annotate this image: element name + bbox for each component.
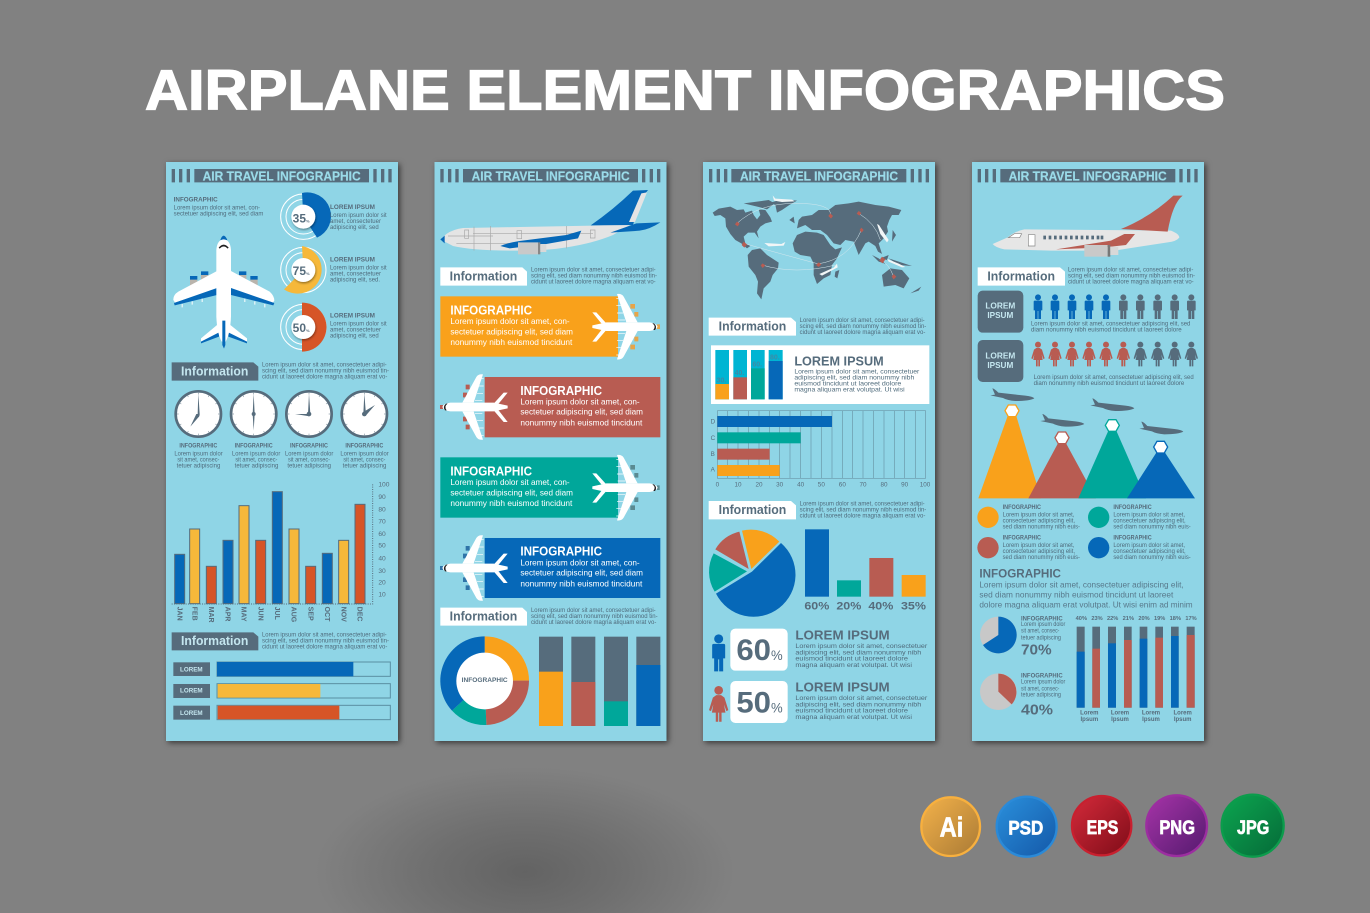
icon: female person xyxy=(709,686,728,722)
legend brick xyxy=(977,534,1080,561)
clock captions: sit amet, consec- xyxy=(288,456,330,463)
stat card 50 percent xyxy=(730,681,788,723)
information heading xyxy=(172,362,258,381)
legend orange: Lorem ipsum dolor sit amet, xyxy=(1003,512,1074,519)
monthly bar chart: AUG xyxy=(290,607,297,622)
legend brick: INFOGRAPHIC xyxy=(1003,534,1041,541)
female pictogram row xyxy=(1031,342,1198,366)
information heading xyxy=(978,267,1065,286)
clock one xyxy=(176,391,221,437)
lorem ipsum label two xyxy=(978,340,1023,382)
banner: orange: sectetuer adipiscing elit, sed diam xyxy=(450,326,573,336)
label 35 percent: adipiscing elit, sed xyxy=(330,224,379,231)
information heading: Information xyxy=(450,268,517,283)
text block two: magna aliquam erat volutpat. Ut wisi xyxy=(795,714,912,721)
stacked percent chart: 21% xyxy=(1123,616,1134,622)
information heading: Information xyxy=(719,318,786,333)
stat card 60 percent xyxy=(730,629,788,671)
monthly bar chart: FEB xyxy=(190,607,197,621)
monthly bar chart: JUN xyxy=(256,607,263,621)
information heading: Information xyxy=(719,502,786,517)
horizontal bar chart: D xyxy=(711,418,716,425)
badge: Ai xyxy=(921,797,980,856)
information text: Lorem ipsum dolor sit amet, consectetuer adipi- xyxy=(800,317,925,324)
legend blue xyxy=(1088,534,1191,561)
information text: Lorem ipsum dolor sit amet, consectetuer adipi- xyxy=(800,501,925,508)
information text: Lorem ipsum dolor sit amet, consectetuer adipi- xyxy=(531,267,656,274)
stacked percent chart: 20% xyxy=(1138,616,1150,622)
horizontal bar chart xyxy=(711,411,931,488)
monthly bar chart: MAR xyxy=(207,607,214,623)
label 75 percent: adipiscing elit, sed. xyxy=(330,276,380,283)
monthly bar chart: NOV xyxy=(339,607,346,622)
stacked percent chart: 19% xyxy=(1154,616,1165,622)
badge: EPS: EPS xyxy=(1087,818,1118,839)
legend orange xyxy=(977,504,1080,531)
donut 50 percent xyxy=(281,303,326,352)
label 75 percent xyxy=(330,256,387,283)
label 40 percent: Lorem ipsum dolor xyxy=(1021,679,1066,686)
badge: JPG: JPG xyxy=(1237,818,1269,839)
male row caption xyxy=(1031,321,1191,334)
badge: PNG: PNG xyxy=(1159,818,1195,839)
monthly bar chart: 30 xyxy=(378,568,386,575)
monthly bar chart: 20 xyxy=(378,580,386,587)
lorem ipsum label two: LOREM xyxy=(985,350,1015,360)
information text: scing elit, sed diam nonummy nibh euismod tin- xyxy=(531,273,657,280)
stacked percent chart xyxy=(1076,616,1197,723)
horizontal bar chart: 60 xyxy=(839,481,846,488)
horizontal bar chart: 20 xyxy=(755,481,763,488)
clock three xyxy=(286,391,332,437)
banner: teal: INFOGRAPHIC xyxy=(450,465,532,479)
label 50 percent: amet, consectetuer xyxy=(330,327,382,334)
intro text: sectetuer adipiscing elit, sed diam xyxy=(174,211,263,218)
stacked column chart xyxy=(539,637,660,726)
banner: brick xyxy=(440,374,660,440)
horizontal bar chart: A xyxy=(711,467,716,474)
information heading xyxy=(709,318,796,336)
monthly bar chart: OCT xyxy=(323,607,330,622)
label 40 percent: 40% xyxy=(1021,702,1053,718)
banner: orange: Lorem ipsum dolor sit amet, con- xyxy=(450,316,570,326)
monthly bar chart: 10 xyxy=(378,591,386,598)
horizontal bar chart: 50 xyxy=(818,481,825,488)
clock captions: INFOGRAPHIC xyxy=(235,443,273,450)
text block one: LOREM IPSUM xyxy=(795,628,890,643)
legend teal: consectetuer adipiscing elit, xyxy=(1113,518,1186,525)
text block two: adipiscing elit, sed diam nonummy nibh xyxy=(795,701,922,708)
card: lorem ipsum with mini columns xyxy=(711,345,929,404)
horizontal bar chart: 40 xyxy=(797,481,805,488)
icon: blue airliner side view xyxy=(440,190,660,254)
clock captions: tetuer adipiscing xyxy=(235,462,279,469)
information heading: Information xyxy=(181,363,248,378)
world map xyxy=(713,195,921,299)
male row caption: Lorem ipsum dolor sit amet, consectetuer adipiscing elit, sed xyxy=(1031,321,1191,328)
stat card 50 percent: % xyxy=(771,699,783,715)
horizontal bar chart: 10 xyxy=(734,481,742,488)
banner: blue: sectetuer adipiscing elit, sed diam xyxy=(520,568,643,578)
label 50 percent xyxy=(330,313,387,340)
infographic paragraph: sed diam nonummy nibh euismod tincidunt ut laoreet xyxy=(979,590,1174,600)
stacked percent chart: Lorem xyxy=(1111,710,1129,716)
banner: brick: Lorem ipsum dolor sit amet, con- xyxy=(520,396,640,406)
horizontal bar chart: 30 xyxy=(776,481,784,488)
donut 50 percent: 50 xyxy=(293,321,306,335)
pie 70 percent xyxy=(980,617,1017,653)
information text: Lorem ipsum dolor sit amet, consectetuer adipi- xyxy=(262,362,387,369)
text block one: magna aliquam erat volutpat. Ut wisi xyxy=(795,662,912,669)
donut 50 percent: % xyxy=(306,328,310,333)
header banner: AIR TRAVEL INFOGRAPHIC xyxy=(740,168,898,183)
lorem ipsum label one: LOREM xyxy=(985,300,1015,310)
monthly bar chart: 60 xyxy=(378,531,386,538)
icons: airplane silhouettes xyxy=(990,388,1183,434)
badge: Ai: Ai xyxy=(940,812,963,843)
clock captions: INFOGRAPHIC xyxy=(290,443,328,450)
progress bar red: LOREM xyxy=(180,711,203,717)
clock captions: INFOGRAPHIC xyxy=(179,443,218,450)
label 70 percent: sit amet, consec- xyxy=(1021,628,1059,635)
legend teal: sed diam nonummy nibh euis- xyxy=(1113,524,1191,531)
information text: cidunt ut laoreet dolore magna aliquam erat vo- xyxy=(531,619,656,626)
clock captions: INFOGRAPHIC xyxy=(345,443,384,450)
information text: scing elit, sed diam nonummy nibh euismod tin- xyxy=(531,613,658,620)
stacked percent chart: 40% xyxy=(1076,616,1087,622)
label 35 percent: LOREM IPSUM xyxy=(330,204,375,211)
donut 75 percent: % xyxy=(306,271,310,276)
label 35 percent xyxy=(330,204,387,231)
badge: PSD xyxy=(997,797,1057,857)
male row caption: diam nonummy nibh euismod tincidunt ut laoreet dolore xyxy=(1031,327,1182,334)
label 50 percent: adipiscing elit, sed xyxy=(330,333,379,340)
infographic paragraph xyxy=(979,567,1193,610)
information text: Lorem ipsum dolor sit amet, consectetuer adipi- xyxy=(1068,267,1193,274)
label 70 percent: tetuer adipiscing xyxy=(1021,634,1061,641)
donut 75 percent: 75 xyxy=(293,264,306,278)
information text xyxy=(262,632,389,651)
monthly bar chart: 70 xyxy=(378,518,386,525)
clock captions: Lorem ipsum dolor xyxy=(232,450,281,457)
intro text: INFOGRAPHIC xyxy=(174,197,218,204)
label 70 percent: INFOGRAPHIC xyxy=(1021,615,1063,622)
legend blue: consectetuer adipiscing elit, xyxy=(1113,548,1186,555)
banner: brick: nonummy nibh euismod tincidunt xyxy=(520,417,643,427)
monthly bar chart: JUL xyxy=(273,607,280,621)
legend teal xyxy=(1088,504,1191,531)
badge: EPS xyxy=(1072,796,1131,855)
horizontal bar chart: 80 xyxy=(880,481,888,488)
label 70 percent: 70% xyxy=(1021,642,1052,658)
progress bar blue: LOREM xyxy=(180,667,203,673)
infographic paragraph: INFOGRAPHIC xyxy=(979,567,1061,581)
information text xyxy=(1068,267,1195,286)
card: lorem ipsum with mini columns: 30. xyxy=(717,378,726,385)
banner: blue xyxy=(440,535,660,601)
label 75 percent: LOREM IPSUM xyxy=(330,256,375,263)
horizontal bar chart: C xyxy=(711,435,716,442)
female row caption: diam nonummy nibh euismod tincidunt ut laoreet dolore xyxy=(1034,380,1185,387)
text block two: LOREM IPSUM xyxy=(795,680,890,695)
horizontal bar chart: 70 xyxy=(859,481,867,488)
legend orange: INFOGRAPHIC xyxy=(1003,504,1041,511)
label 70 percent xyxy=(1021,615,1066,658)
file format badges xyxy=(921,795,1284,857)
stat card 60 percent: 60 xyxy=(736,634,771,667)
label 40 percent: tetuer adipiscing xyxy=(1021,692,1061,699)
stacked percent chart: Ipsum xyxy=(1142,717,1160,723)
donut 35 percent xyxy=(281,192,331,239)
column chart with percentages: 20% xyxy=(836,600,861,612)
banner: brick: sectetuer adipiscing elit, sed diam xyxy=(520,407,643,417)
legend teal: Lorem ipsum dolor sit amet, xyxy=(1113,512,1185,519)
donut chart xyxy=(440,636,529,725)
card: lorem ipsum with mini columns: euismod tincidunt ut laoreet dolore xyxy=(794,380,902,387)
stacked percent chart: Ipsum xyxy=(1174,717,1191,723)
progress bar yellow: LOREM xyxy=(180,689,203,695)
donut 35 percent: 35 xyxy=(293,211,306,225)
clock four xyxy=(342,391,387,437)
information text xyxy=(531,267,657,286)
monthly bar chart: 90 xyxy=(378,494,386,501)
label 50 percent: Lorem ipsum dolor sit xyxy=(330,321,387,328)
information text: cidunt ut laoreet dolore magna aliquam erat vo- xyxy=(531,279,656,286)
stacked percent chart: 18% xyxy=(1170,616,1181,622)
horizontal bar chart: 90 xyxy=(901,481,909,488)
icon: airplane top view xyxy=(173,236,274,349)
stacked percent chart: Lorem xyxy=(1142,710,1160,716)
clock captions: sit amet, consec- xyxy=(235,456,277,463)
donut 75 percent xyxy=(281,246,326,294)
monthly bar chart: JAN xyxy=(175,607,182,621)
legend teal: INFOGRAPHIC xyxy=(1113,504,1152,511)
badge: PNG xyxy=(1146,795,1207,856)
banner: blue: INFOGRAPHIC xyxy=(520,545,602,559)
clock captions: Lorem ipsum dolor xyxy=(340,450,389,457)
intro text xyxy=(174,197,263,218)
legend brick: consectetuer adipiscing elit, xyxy=(1003,548,1075,555)
information text: scing elit, sed diam nonummy nibh euismod tin- xyxy=(800,507,926,514)
badge: JPG xyxy=(1222,795,1284,857)
panel: banners infographic xyxy=(434,162,666,741)
legend blue: Lorem ipsum dolor sit amet, xyxy=(1113,542,1185,549)
banner: teal: nonummy nibh euismod tincidunt xyxy=(450,498,573,508)
stacked percent chart: Lorem xyxy=(1080,710,1098,716)
text block one xyxy=(795,628,928,669)
column chart with percentages: 40% xyxy=(868,600,893,612)
card: lorem ipsum with mini columns: 80. xyxy=(770,354,780,361)
information heading: Information xyxy=(987,268,1055,283)
information text: scing elit, sed diam nonummy nibh euismod tin- xyxy=(262,638,389,645)
information text xyxy=(800,501,926,520)
stat card 50 percent: 50 xyxy=(736,686,771,719)
information text: cidunt ut laoreet dolore magna aliquam erat vo- xyxy=(262,374,387,381)
horizontal bar chart: 0 xyxy=(716,481,720,488)
column chart with percentages: 60% xyxy=(804,600,829,612)
information text: Lorem ipsum dolor sit amet, consectetuer adipi- xyxy=(531,607,656,614)
clock captions: tetuer adipiscing xyxy=(343,462,387,469)
text block two: euismod tincidunt ut laoreet dolore xyxy=(795,708,908,715)
panel: people and pyramids infographic xyxy=(972,162,1204,741)
clock two xyxy=(231,391,276,437)
progress bar yellow xyxy=(173,684,390,698)
text block one: Lorem ipsum dolor sit amet, consectetuer xyxy=(795,643,928,650)
information text: scing elit, sed diam nonummy nibh euismod tin- xyxy=(800,323,926,330)
monthly bar chart xyxy=(172,482,390,623)
information text xyxy=(531,607,658,626)
icon: brick airliner side view xyxy=(993,196,1183,257)
information heading xyxy=(440,267,527,286)
banner: orange xyxy=(440,294,660,359)
male pictogram row xyxy=(1034,294,1196,319)
pie 40 percent xyxy=(980,673,1017,710)
icon: male person xyxy=(712,634,725,671)
clock captions: sit amet, consec- xyxy=(343,456,385,463)
legend brick: Lorem ipsum dolor sit amet, xyxy=(1003,542,1074,549)
information heading: Information xyxy=(450,608,517,623)
card: lorem ipsum with mini columns: Lorem ipsum dolor sit amet, consectetuer xyxy=(794,368,920,375)
intro text: Lorem ipsum dolor sit amet, con- xyxy=(174,205,260,212)
information text xyxy=(262,362,389,381)
horizontal bar chart: 100 xyxy=(920,481,931,488)
pie chart xyxy=(709,530,795,617)
panel: world map infographic xyxy=(703,162,935,741)
banner: brick: INFOGRAPHIC xyxy=(520,384,602,398)
lorem ipsum label one xyxy=(978,291,1023,333)
banner: orange: INFOGRAPHIC xyxy=(450,304,532,318)
stat card 60 percent: % xyxy=(771,647,783,663)
badge: PSD: PSD xyxy=(1008,818,1043,839)
information heading xyxy=(709,501,796,519)
clock captions: Lorem ipsum dolor xyxy=(285,450,334,457)
legend blue: INFOGRAPHIC xyxy=(1113,534,1152,541)
card: lorem ipsum with mini columns: magna aliquam erat volutpat. Ut wisi xyxy=(794,387,905,394)
card: lorem ipsum with mini columns: 60. xyxy=(752,361,762,368)
text block one: euismod tincidunt ut laoreet dolore xyxy=(795,656,908,663)
header banner: AIR TRAVEL INFOGRAPHIC xyxy=(1009,168,1167,183)
stacked percent chart: 23% xyxy=(1091,616,1103,622)
female row caption xyxy=(1034,374,1194,387)
progress bar red xyxy=(173,705,390,720)
card: lorem ipsum with mini columns: adipiscing elit, sed diam nonummy nibh xyxy=(794,374,915,381)
stacked percent chart: Ipsum xyxy=(1111,717,1129,723)
legend brick: sed diam nonummy nibh euis- xyxy=(1003,554,1080,561)
lorem ipsum label one: IPSUM xyxy=(987,310,1013,320)
female row caption: Lorem ipsum dolor sit amet, consectetuer adipiscing elit, sed xyxy=(1034,374,1194,381)
label 75 percent: amet, consectetuer xyxy=(330,270,382,277)
information text: Lorem ipsum dolor sit amet, consectetuer adipi- xyxy=(262,632,387,639)
header banner: AIR TRAVEL INFOGRAPHIC xyxy=(472,168,630,183)
legend orange: sed diam nonummy nibh euis- xyxy=(1003,524,1080,531)
label 75 percent: Lorem ipsum dolor sit xyxy=(330,264,387,271)
monthly bar chart: 50 xyxy=(378,543,386,550)
progress bar blue xyxy=(173,662,390,676)
title: AIRPLANE ELEMENT INFOGRAPHICS xyxy=(145,58,1225,122)
column chart with percentages xyxy=(804,529,926,612)
banner: blue: Lorem ipsum dolor sit amet, con- xyxy=(520,557,640,567)
banner: teal xyxy=(440,455,660,520)
label 70 percent: Lorem ipsum dolor xyxy=(1021,621,1066,628)
column chart with percentages: 35% xyxy=(901,600,926,612)
triangle chart xyxy=(978,405,1195,498)
information text: scing elit, sed diam nonummy nibh euismod tin- xyxy=(1068,273,1195,280)
stacked percent chart: Lorem xyxy=(1174,710,1192,716)
text block one: adipiscing elit, sed diam nonummy nibh xyxy=(795,649,922,656)
stacked percent chart: Ipsum xyxy=(1081,717,1098,723)
header banner: AIR TRAVEL INFOGRAPHIC xyxy=(203,168,361,183)
monthly bar chart: 80 xyxy=(378,506,386,513)
horizontal bar chart: B xyxy=(711,451,715,458)
infographic paragraph: Lorem ipsum dolor sit amet, consectetuer adipiscing elit, xyxy=(979,580,1184,590)
monthly bar chart: SEP xyxy=(306,607,313,621)
banner: teal: Lorem ipsum dolor sit amet, con- xyxy=(450,477,570,487)
text block two xyxy=(795,680,928,721)
clock captions: Lorem ipsum dolor xyxy=(174,450,223,457)
information text xyxy=(800,317,926,336)
label 40 percent xyxy=(1021,672,1066,718)
monthly bar chart: APR xyxy=(224,607,231,621)
monthly bar chart: 40 xyxy=(378,555,386,562)
information text: cidunt ut laoreet dolore magna aliquam erat vo- xyxy=(800,513,925,520)
information text: cidunt ut laoreet dolore magna aliquam erat vo- xyxy=(800,329,925,336)
information text: cidunt ut laoreet dolore magna aliquam erat vo- xyxy=(262,644,387,651)
stacked percent chart: 22% xyxy=(1107,616,1118,622)
infographic paragraph: dolore magna aliquam erat volutpat. Ut wisi enim ad minim xyxy=(979,600,1193,610)
information text: scing elit, sed diam nonummy nibh euismod tin- xyxy=(262,368,389,375)
clock captions: tetuer adipiscing xyxy=(287,462,331,469)
card: lorem ipsum with mini columns: LOREM IPSUM xyxy=(794,354,884,369)
panel: clock and bars infographic xyxy=(166,162,398,741)
label 35 percent: Lorem ipsum dolor sit xyxy=(330,212,387,219)
information heading: Information xyxy=(181,633,248,648)
lorem ipsum label two: IPSUM xyxy=(987,360,1013,370)
label 40 percent: sit amet, consec- xyxy=(1021,685,1059,692)
label 35 percent: amet, consectetuer xyxy=(330,218,382,225)
banner: orange: nonummy nibh euismod tincidunt xyxy=(450,337,573,347)
legend orange: consectetuer adipiscing elit, xyxy=(1003,518,1075,525)
banner: blue: nonummy nibh euismod tincidunt xyxy=(520,578,643,588)
label 40 percent: INFOGRAPHIC xyxy=(1021,672,1063,679)
clock captions xyxy=(174,443,389,469)
legend blue: sed diam nonummy nibh euis- xyxy=(1113,554,1191,561)
monthly bar chart: 100 xyxy=(378,482,390,489)
stacked percent chart: 17% xyxy=(1185,616,1197,622)
label 50 percent: LOREM IPSUM xyxy=(330,313,375,320)
clock captions: tetuer adipiscing xyxy=(177,462,221,469)
monthly bar chart: DEC xyxy=(356,607,363,621)
clock captions: sit amet, consec- xyxy=(177,456,219,463)
text block two: Lorem ipsum dolor sit amet, consectetuer xyxy=(795,695,928,702)
banner: teal: sectetuer adipiscing elit, sed diam xyxy=(450,487,573,497)
monthly bar chart: MAY xyxy=(240,607,247,622)
donut chart: INFOGRAPHIC xyxy=(462,677,508,684)
information text: cidunt ut laoreet dolore magna aliquam erat vo- xyxy=(1068,279,1194,286)
card: lorem ipsum with mini columns: 40. xyxy=(735,370,744,377)
donut 35 percent: % xyxy=(306,218,310,223)
